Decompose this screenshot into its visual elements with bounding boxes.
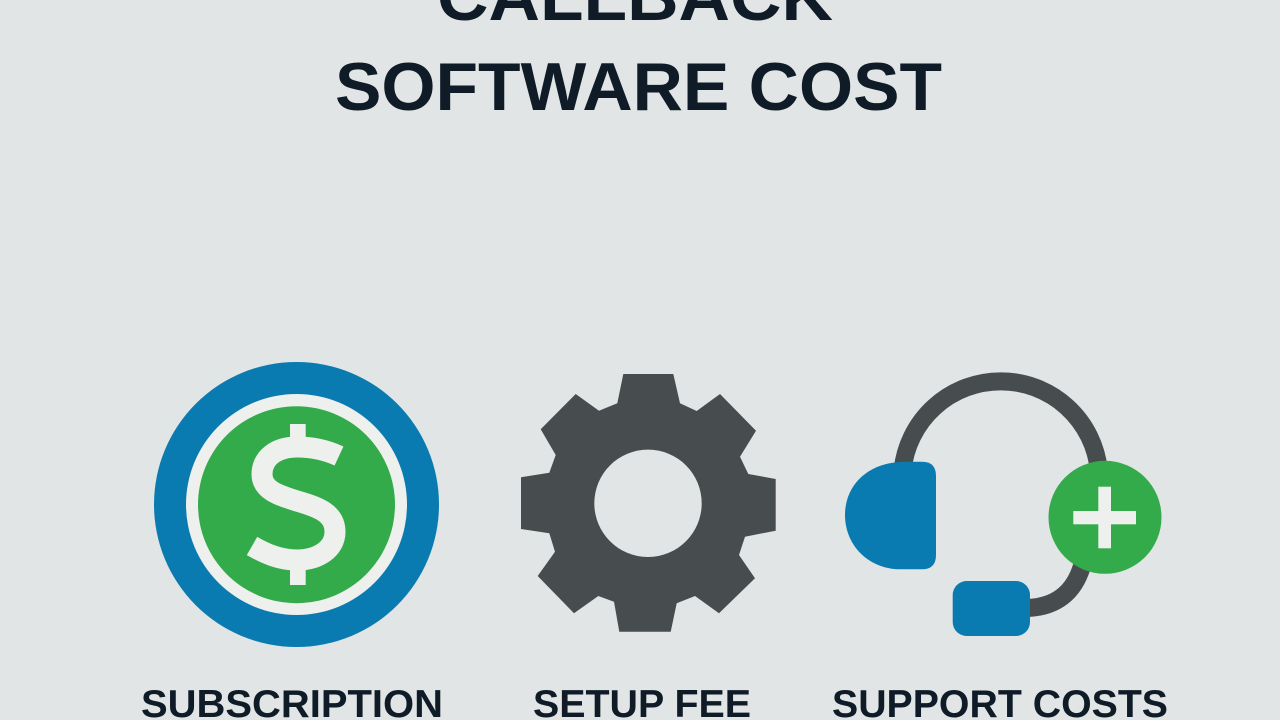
ear cup xyxy=(845,462,936,569)
headband xyxy=(903,381,1099,470)
plus badge xyxy=(1048,461,1162,574)
title xyxy=(335,0,942,125)
icon: subscription dollar coin xyxy=(154,362,439,647)
microphone boom xyxy=(1028,566,1082,608)
microphone xyxy=(953,581,1030,636)
icon: support headset with plus xyxy=(845,381,1162,636)
icon: setup gear xyxy=(521,374,776,632)
title: SOFTWARE COST xyxy=(335,49,942,125)
